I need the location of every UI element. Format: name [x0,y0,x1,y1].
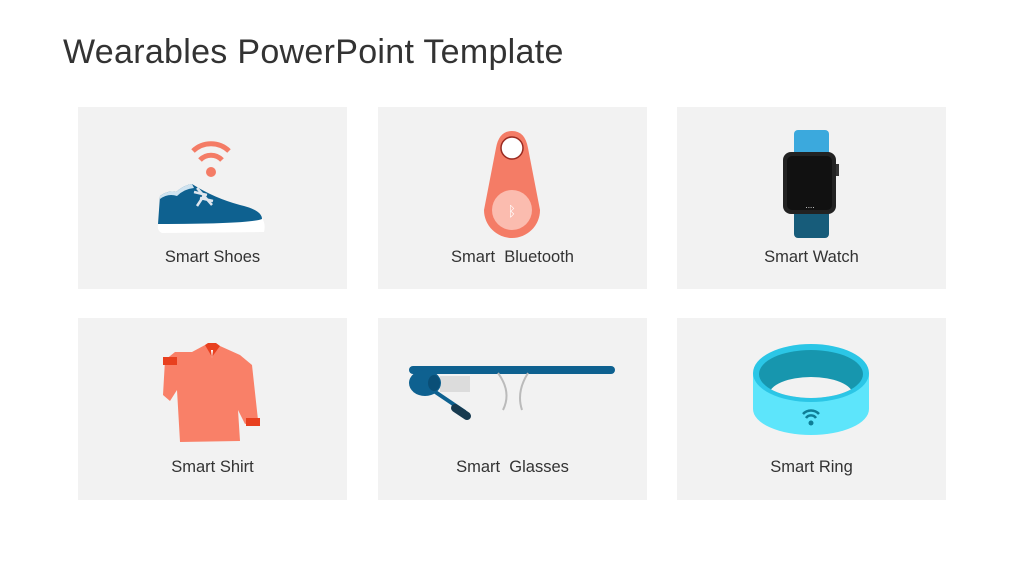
panel: smart watch: Smart Watch [764,248,859,266]
icon: watch [783,130,839,238]
panel: smart ring: Smart Ring [770,458,853,476]
panel: smart watch [677,107,946,289]
icon: watch: .... [806,201,814,210]
panel: smart shoes: Smart Shoes [165,248,260,266]
title: Wearables PowerPoint Template [63,33,564,71]
panel: smart glasses [378,318,647,500]
panel: smart shoes [78,107,347,289]
icon: bluetooth tag: ᛒ [508,203,516,219]
panel: smart shirt: Smart Shirt [171,458,254,476]
icon: bluetooth tag [484,131,540,238]
icon: shoe [158,141,264,233]
icon: glasses [409,366,615,420]
panel: smart bluetooth: Smart Bluetooth [451,248,574,266]
panel: smart bluetooth [378,107,647,289]
panel: smart shirt [78,318,347,500]
panel: smart glasses: Smart Glasses [456,458,569,476]
icon: ring [753,344,869,435]
panel: smart ring [677,318,946,500]
icon: shirt [163,343,260,442]
